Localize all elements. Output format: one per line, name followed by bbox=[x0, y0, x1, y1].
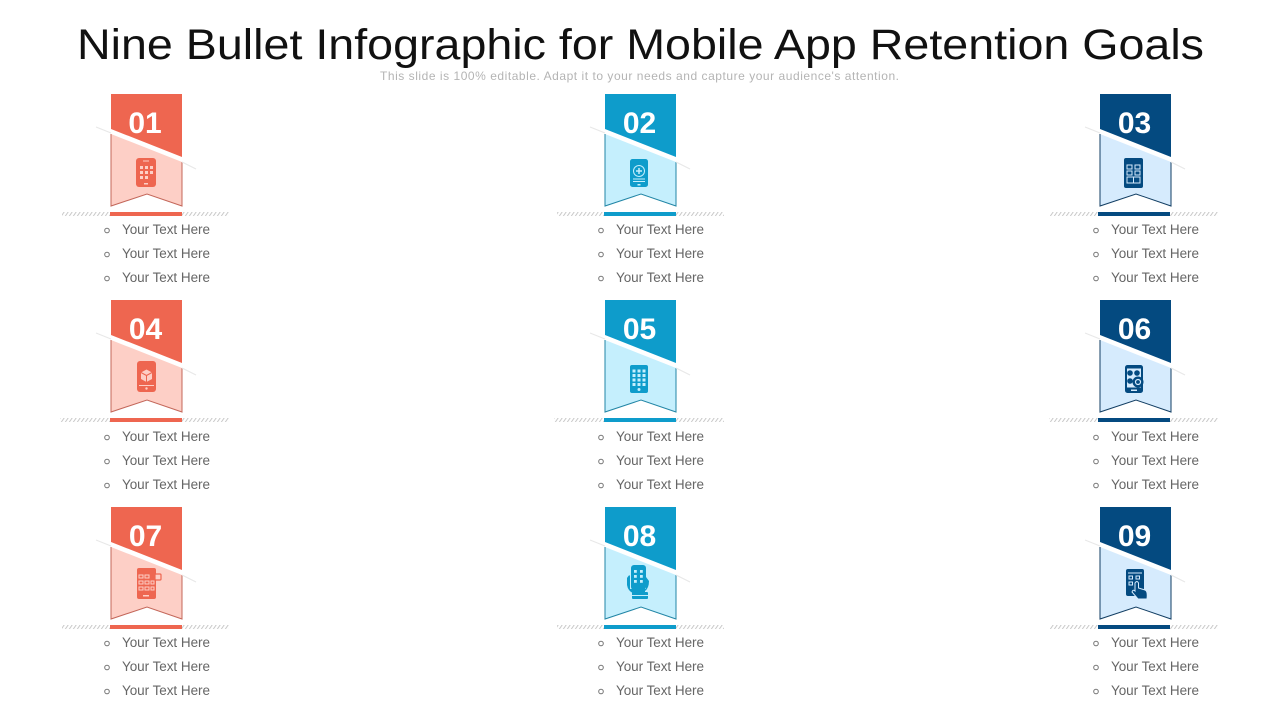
ribbon top: 02 bbox=[605, 94, 676, 157]
item 05 bbox=[554, 300, 724, 492]
icon: hand holding phone bbox=[627, 565, 649, 599]
bullet list: 02: Your Text Here bbox=[616, 246, 704, 261]
fold line: 06 bbox=[1085, 333, 1185, 375]
bullet list: 05: Your Text Here bbox=[616, 453, 704, 468]
bullet list: 07: Your Text Here bbox=[122, 659, 210, 674]
subtitle: This slide is 100% editable. Adapt it to your needs and capture your audience's attention. bbox=[380, 69, 899, 83]
bullet list: 06: Your Text Here bbox=[1111, 453, 1199, 468]
icon: tablet with windows bbox=[1124, 158, 1143, 188]
fold line: 05 bbox=[590, 333, 690, 375]
baseline: 03 bbox=[1050, 212, 1218, 216]
bullet list: 01: Your Text Here bbox=[122, 222, 210, 237]
ribbon bottom: 02 bbox=[605, 134, 676, 206]
item 08 bbox=[557, 507, 724, 698]
bullet list: 03: Your Text Here bbox=[1111, 270, 1199, 285]
baseline: 07 bbox=[62, 625, 229, 629]
bullet list: 09: Your Text Here bbox=[1111, 635, 1199, 650]
number 04: 04 bbox=[129, 313, 162, 346]
baseline: 06 bbox=[1049, 418, 1218, 422]
bullet list: 09: Your Text Here bbox=[1111, 683, 1199, 698]
bullet list: 04 bbox=[105, 429, 210, 492]
icon: phone with app tiles bbox=[137, 568, 161, 599]
bullet list: 08: Your Text Here bbox=[616, 683, 704, 698]
ribbon bottom: 03 bbox=[1100, 134, 1171, 206]
bullet list: 08 bbox=[599, 635, 704, 698]
ribbon bottom: 06 bbox=[1100, 340, 1171, 412]
baseline: 04 bbox=[60, 418, 229, 422]
ribbon top: 07 bbox=[111, 507, 182, 570]
bullet list: 06 bbox=[1094, 429, 1199, 492]
item 01 bbox=[62, 94, 229, 285]
item 02 bbox=[557, 94, 724, 285]
ribbon bottom: 04 bbox=[111, 340, 182, 412]
ribbon top: 06 bbox=[1100, 300, 1171, 363]
fold line: 02 bbox=[590, 127, 690, 169]
bullet list: 03 bbox=[1094, 222, 1199, 285]
item 06 bbox=[1049, 300, 1218, 492]
number 05: 05 bbox=[623, 313, 656, 346]
ribbon top: 01 bbox=[111, 94, 182, 157]
bullet list: 02 bbox=[599, 222, 704, 285]
number 01: 01 bbox=[128, 107, 162, 140]
icon: phone with tapping hand bbox=[1126, 569, 1147, 599]
bullet list: 07: Your Text Here bbox=[122, 683, 210, 698]
item 07 bbox=[62, 507, 229, 698]
number 02: 02 bbox=[623, 107, 656, 140]
ribbon bottom: 09 bbox=[1100, 547, 1171, 619]
bullet list: 02: Your Text Here bbox=[616, 270, 704, 285]
fold line: 08 bbox=[590, 540, 690, 582]
bullet list: 04: Your Text Here bbox=[122, 477, 210, 492]
baseline: 01 bbox=[62, 212, 229, 216]
bullet list: 08: Your Text Here bbox=[616, 635, 704, 650]
baseline: 02 bbox=[557, 212, 724, 216]
bullet list: 05: Your Text Here bbox=[616, 477, 704, 492]
bullet list: 04: Your Text Here bbox=[122, 429, 210, 444]
number 07: 07 bbox=[129, 520, 162, 553]
bullet list: 05 bbox=[599, 429, 704, 492]
ribbon bottom: 05 bbox=[605, 340, 676, 412]
icon: phone with keypad bbox=[630, 365, 648, 393]
bullet list: 09: Your Text Here bbox=[1111, 659, 1199, 674]
ribbon top: 09 bbox=[1100, 507, 1171, 570]
icon: phone with cube bbox=[137, 361, 156, 392]
ribbon top: 05 bbox=[605, 300, 676, 363]
bullet list: 02: Your Text Here bbox=[616, 222, 704, 237]
number 03: 03 bbox=[1118, 107, 1151, 140]
bullet list: 07: Your Text Here bbox=[122, 635, 210, 650]
item 03 bbox=[1050, 94, 1218, 285]
bullet list: 09 bbox=[1094, 635, 1199, 698]
fold line: 04 bbox=[96, 333, 196, 375]
bullet list: 07 bbox=[105, 635, 210, 698]
baseline: 08 bbox=[557, 625, 724, 629]
bullet list: 08: Your Text Here bbox=[616, 659, 704, 674]
item 04 bbox=[60, 300, 229, 492]
number 09: 09 bbox=[1118, 520, 1151, 553]
item 09 bbox=[1050, 507, 1218, 698]
number 06: 06 bbox=[1118, 313, 1151, 346]
bullet list: 01: Your Text Here bbox=[122, 246, 210, 261]
bullet list: 06: Your Text Here bbox=[1111, 429, 1199, 444]
bullet list: 03: Your Text Here bbox=[1111, 222, 1199, 237]
ribbon bottom: 01 bbox=[111, 134, 182, 206]
fold line: 09 bbox=[1085, 540, 1185, 582]
icon: phone with apps and gear bbox=[1125, 365, 1144, 393]
ribbon top: 04 bbox=[111, 300, 182, 363]
baseline: 05 bbox=[554, 418, 724, 422]
bullet list: 06: Your Text Here bbox=[1111, 477, 1199, 492]
icon: phone with target bbox=[630, 159, 648, 187]
ribbon top: 03 bbox=[1100, 94, 1171, 157]
ribbon bottom: 07 bbox=[111, 547, 182, 619]
bullet list: 03: Your Text Here bbox=[1111, 246, 1199, 261]
bullet list: 04: Your Text Here bbox=[122, 453, 210, 468]
bullet list: 01: Your Text Here bbox=[122, 270, 210, 285]
ribbon top: 08 bbox=[605, 507, 676, 570]
bullet list: 01 bbox=[105, 222, 210, 285]
baseline: 09 bbox=[1050, 625, 1218, 629]
fold line: 01 bbox=[96, 127, 196, 169]
fold line: 07 bbox=[96, 540, 196, 582]
fold line: 03 bbox=[1085, 127, 1185, 169]
ribbon bottom: 08 bbox=[605, 547, 676, 619]
icon: phone with app grid bbox=[136, 158, 156, 187]
number 08: 08 bbox=[623, 520, 656, 553]
bullet list: 05: Your Text Here bbox=[616, 429, 704, 444]
title: Nine Bullet Infographic for Mobile App Retention Goals bbox=[77, 21, 1204, 69]
